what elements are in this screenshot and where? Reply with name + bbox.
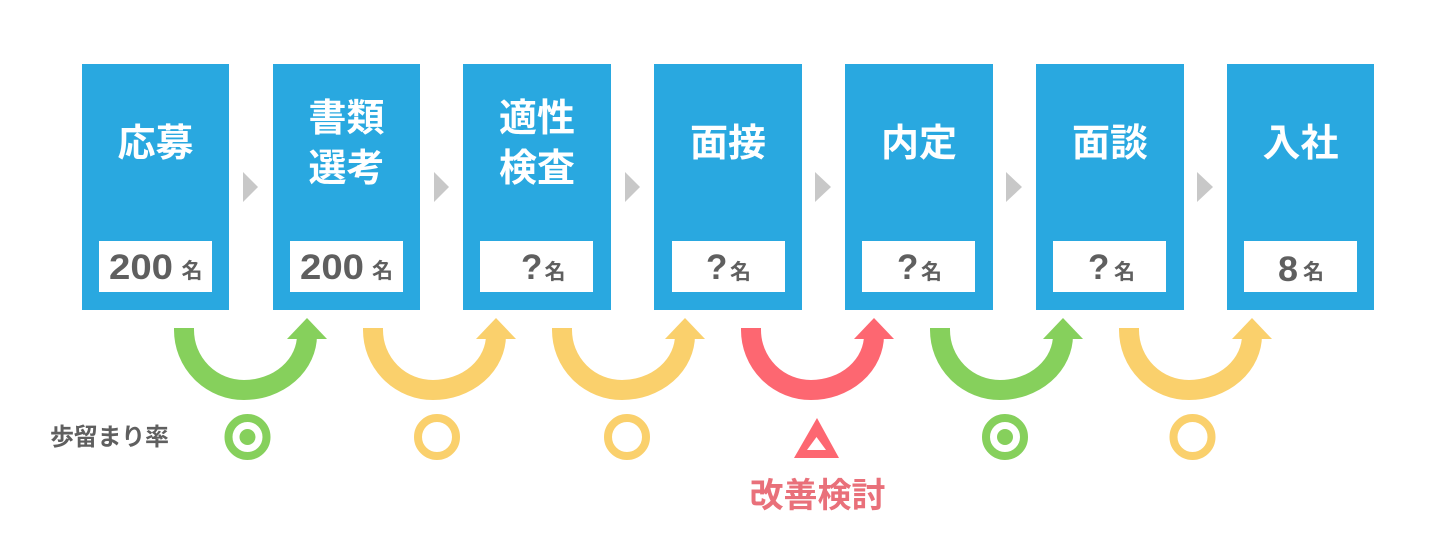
curved arrow: 書類選考 to 適性検査 — [373, 318, 516, 390]
step: 入社: 入社 — [1262, 123, 1339, 165]
arrow: chevron 3 — [625, 172, 640, 202]
step: 応募: 名 — [182, 260, 202, 283]
step: 応募: 200 — [109, 248, 173, 287]
rating: circle 2 — [418, 418, 456, 456]
arrow: chevron 6 — [1197, 172, 1213, 202]
step: 書類選考: 書類 — [308, 98, 385, 140]
step: 書類選考 — [273, 64, 420, 310]
step: 内定 — [845, 64, 993, 310]
step: 適性検査 — [463, 64, 611, 310]
arrow: chevron 2 — [434, 172, 449, 202]
rating: triangle — [794, 418, 839, 458]
label: 歩留まり率: 歩留まり率 — [50, 424, 169, 451]
curved arrow: 応募 to 書類選考 — [184, 318, 327, 390]
arrow: chevron 4 — [815, 172, 831, 202]
step: 面接 — [654, 64, 802, 310]
step: 内定: 内定 — [881, 123, 957, 165]
rating: double circle 5 — [986, 418, 1024, 456]
step: 適性検査: ? — [521, 248, 542, 287]
step: 応募: 応募 — [117, 123, 194, 165]
step: 書類選考: 名 — [372, 260, 393, 283]
step: 面談: ? — [1088, 248, 1109, 287]
rating: circle 6 — [1174, 418, 1212, 456]
step: 入社: 名 — [1303, 261, 1324, 284]
rating: double circle 1 — [228, 418, 266, 456]
step: 入社 — [1227, 64, 1374, 310]
step: 適性検査: 名 — [544, 261, 566, 284]
curved arrow: 適性検査 to 面接 — [562, 318, 705, 390]
arrow: chevron 1 — [243, 172, 258, 202]
callout: 改善検討: 改善検討 — [750, 477, 886, 515]
step: 適性検査: 適性 — [499, 98, 575, 140]
curved arrow: 面談 to 入社 — [1129, 318, 1272, 390]
step: 適性検査: 検査 — [499, 148, 575, 190]
step: 面接: ? — [706, 248, 727, 287]
step: 面談: 名 — [1114, 261, 1135, 284]
step: 内定: ? — [897, 248, 918, 287]
step: 内定: 名 — [921, 261, 942, 284]
step: 面談 — [1036, 64, 1184, 310]
curved arrow: 面接 to 内定 — [751, 318, 894, 390]
step: 面談: 面談 — [1072, 123, 1148, 165]
step: 書類選考: 200 — [300, 248, 364, 287]
step: 応募 — [82, 64, 229, 310]
arrow: chevron 5 — [1006, 172, 1022, 202]
step: 面接: 面接 — [690, 123, 766, 165]
step: 入社: 8 — [1278, 250, 1298, 289]
rating: circle 3 — [608, 418, 646, 456]
step: 書類選考: 選考 — [308, 148, 385, 190]
step: 面接: 名 — [730, 261, 751, 284]
curved arrow: 内定 to 面談 — [940, 318, 1083, 390]
